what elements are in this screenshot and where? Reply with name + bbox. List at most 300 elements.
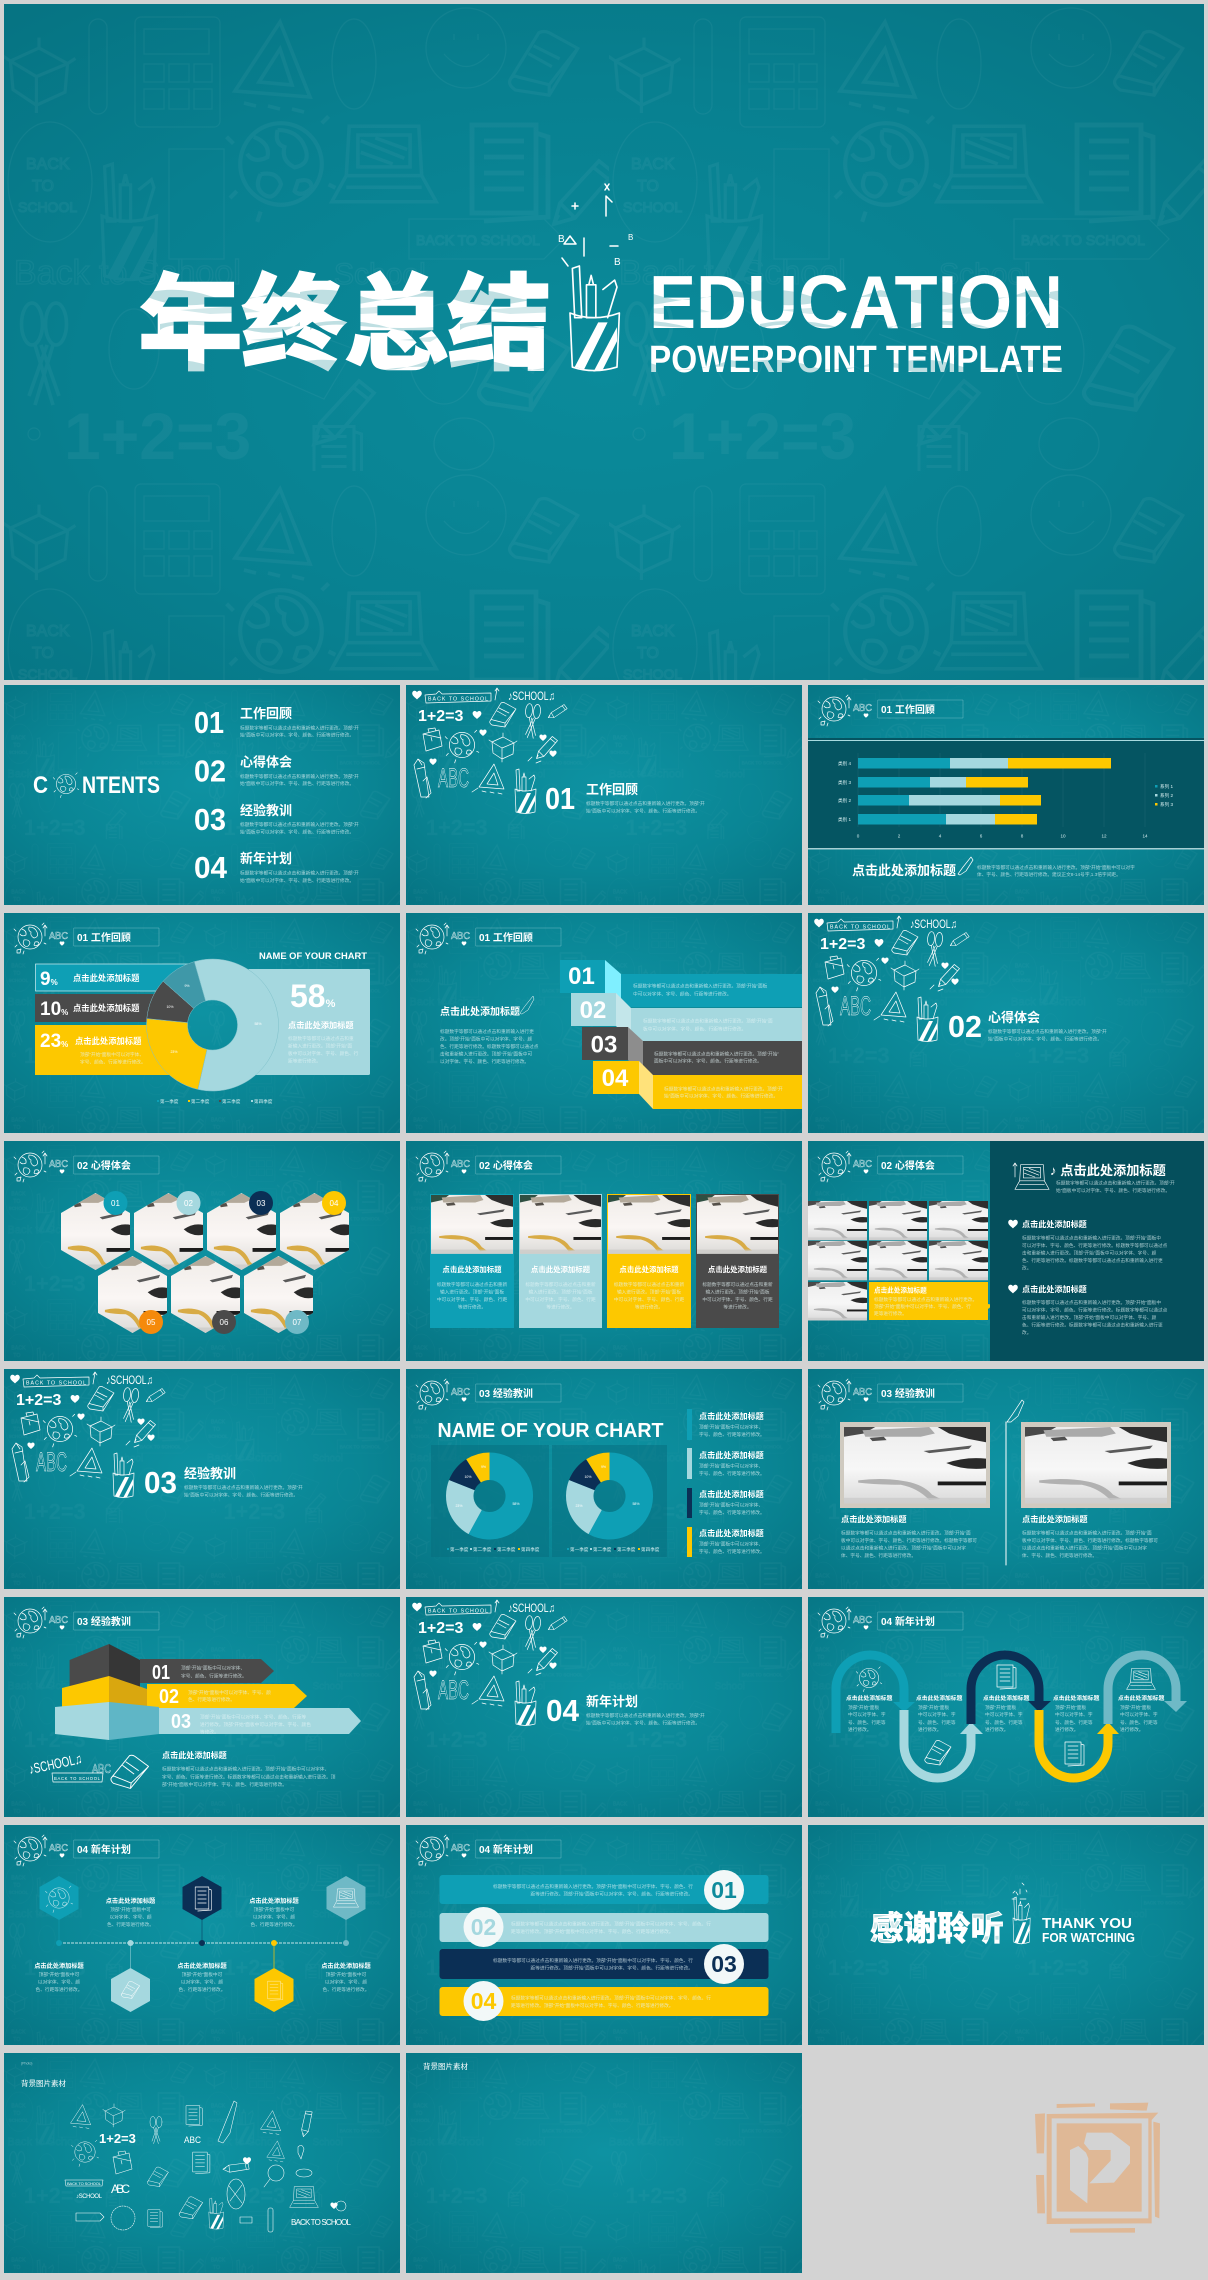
card 2	[519, 1194, 602, 1328]
panel item 1: 点击此处添加标题	[1022, 1219, 1087, 1229]
card 4: 标题数字等都可以通过点击和重新	[702, 1281, 773, 1288]
donut legend: 第一季度	[160, 1098, 179, 1105]
bottom text: 标题数字等都可以通过点击和重新输入进行更改。顶部“开始”面板中可以对字体、	[162, 1766, 329, 1773]
list item 4: 字号、颜色、行距等进行修改。	[699, 1548, 765, 1555]
contents item 02: 02	[194, 753, 226, 788]
timeline text 3: 点击此处添加标题	[34, 1962, 85, 1970]
contents item 03: 经验教训	[240, 803, 292, 818]
icon: pencil cup with floating symbols: B	[558, 234, 565, 245]
flow text 3: 进行修改。	[985, 1726, 1008, 1733]
section tag: 01 工作回顾	[77, 931, 131, 944]
flow text 1: 点击此处添加标题	[846, 1694, 893, 1702]
arrow 03: 03	[171, 1711, 191, 1733]
section tag: 04 新年计划	[77, 1843, 131, 1856]
doodle cluster: ABC	[438, 763, 469, 793]
donut panel 2	[552, 1445, 667, 1557]
flow text 4: 点击此处添加标题	[1053, 1694, 1100, 1702]
list item 1: 字号、颜色、行距等进行修改。	[699, 1431, 765, 1438]
card 1: 点击此处添加标题	[442, 1265, 502, 1274]
bar chart: 14	[1142, 834, 1148, 838]
step 02: 板中可以对字体、字号、颜色、行距等进行修改。	[643, 1026, 746, 1033]
doodle cluster: BACK TO SCHOOL	[428, 696, 488, 702]
timeline text 4: 顶部“开始”面板中可	[182, 1971, 223, 1978]
timeline text 1: 顶部“开始”面板中可	[110, 1906, 151, 1913]
donut panel 2: 第四季度	[641, 1546, 660, 1553]
contents item 02: 始”面板中可以对字体、字号、颜色、行距等进行修改。	[240, 780, 354, 787]
card 1: 标题数字等都可以通过点击和重新	[437, 1281, 507, 1288]
flow text 2: 号、颜色、行距等	[918, 1719, 956, 1726]
contents item 03: 标题数字等都可以通过点击和重新输入进行更改。顶部“开	[240, 821, 359, 828]
icon: brush	[520, 996, 534, 1014]
timeline text 4: 以对字体、字号、颜	[181, 1978, 223, 1986]
step 01: 中可以对字体、字号、颜色、行距等进行修改。	[633, 991, 731, 998]
divider with brush	[1006, 1400, 1024, 1565]
callout 58%	[248, 969, 370, 1075]
pill 03	[440, 1944, 768, 1984]
list item 3	[687, 1488, 765, 1518]
section tag: 04 新年计划	[479, 1843, 533, 1856]
section tag	[416, 1379, 561, 1410]
flow text 1: 号、颜色、行距等	[848, 1719, 886, 1726]
yellow caption box: 顶部“开始”面板中可以对字体、字号、颜色、行	[874, 1303, 971, 1310]
section tag: 03 经验教训	[77, 1615, 131, 1628]
chart legend	[1155, 783, 1173, 808]
icon: pencil cup with floating symbols: B	[614, 257, 621, 268]
section number: 01	[545, 781, 575, 816]
thank you line: THANK YOU	[1042, 1915, 1132, 1932]
card 2: 标题数字等都可以通过点击和重新	[525, 1281, 596, 1288]
slide: double donut charts	[406, 1369, 802, 1589]
section tag: 03 经验教训	[479, 1387, 533, 1400]
left text: 以对字体、字号、颜色、行距等进行修改。	[440, 1058, 529, 1065]
framed photo 1	[840, 1422, 990, 1508]
section tag	[14, 923, 159, 954]
list item 1	[687, 1409, 765, 1440]
callout 58%: 点击此处添加标题	[288, 1020, 354, 1030]
left text: 改。顶部“开始”面板中可以对字体、字号、颜	[440, 1036, 532, 1042]
contents item 04: 始”面板中可以对字体、字号、颜色、行距等进行修改。	[240, 877, 354, 884]
arrow 01: 顶部“开始”面板中可以对字体、	[181, 1664, 245, 1672]
panel item 2: 可以对字体、字号、颜色、行距等进行修改。标题数字等都可以通过点	[1022, 1306, 1168, 1313]
section tag	[818, 1151, 963, 1182]
callout 58%: 距等进行修改。	[288, 1058, 321, 1064]
donut chart: 23%	[170, 1050, 178, 1054]
list item 3: 字号、颜色、行距等进行修改。	[699, 1509, 765, 1516]
card 4: 点击此处添加标题	[708, 1265, 768, 1274]
pill 02	[440, 1907, 768, 1947]
slide: plain background material	[406, 2053, 802, 2273]
photo 2 caption	[1022, 1514, 1158, 1559]
panel intro: 标题数字等都可以通过点击和重新输入进行更改。顶部“开	[1056, 1180, 1175, 1186]
bar chart: 6	[980, 834, 983, 838]
greyscale photo grid	[808, 1201, 988, 1320]
pill 01: 01	[711, 1877, 737, 1903]
step 02: 标题数字等都可以通过点击和重新输入进行更改。顶部“开始”面	[643, 1018, 773, 1025]
step 04: 04	[602, 1065, 629, 1092]
pill 03: 标题数字等都可以通过点击和重新输入进行更改。顶部“开始”面板中可以对字体、字号、颜色、行	[493, 1957, 693, 1964]
arrow 03	[55, 1702, 361, 1740]
photo 2 caption: 标题数字等都可以通过点击和重新输入进行更改。顶部“开始”面	[1022, 1530, 1152, 1537]
photo 2 caption: 体、字号、颜色、行距等进行修改。	[1022, 1552, 1097, 1559]
timeline text 3: 色、行距等进行修改。	[36, 1986, 82, 1993]
panel item 1: 标题数字等都可以通过点击和重新输入进行更改。顶部“开始”面板中	[1022, 1234, 1161, 1242]
contents item 01: 01	[194, 705, 224, 740]
doodle sheet: ♪SCHOOL	[76, 2194, 103, 2200]
callout 23%: 字号、颜色、行距等进行修改。	[80, 1058, 146, 1066]
slide: four pill bars	[406, 1825, 802, 2045]
section tag	[416, 1835, 561, 1866]
doodle: school and book	[27, 1750, 150, 1790]
doodle cluster: ABC	[438, 1675, 469, 1705]
panel intro: 始”面板中可以对字体、字号、颜色、行距等进行修改。	[1056, 1187, 1170, 1194]
slide: section 01	[406, 685, 802, 905]
pill 01: 标题数字等都可以通过点击和重新输入进行更改。顶部“开始”面板中可以对字体、字号、颜色、行	[493, 1883, 693, 1890]
section tag: 01 工作回顾	[479, 931, 533, 944]
callout 58%: 板中可以对字体、字号、颜色、行	[288, 1050, 359, 1057]
left title: 点击此处添加标题	[440, 1005, 520, 1018]
arrow 03: 等修改。	[200, 1728, 219, 1736]
list item 1: 顶部“开始”面板中可以对字体、	[699, 1424, 763, 1430]
doodle: school and book: BACK TO SCHOOL	[54, 1776, 101, 1781]
doodle sheet: ABC	[111, 2182, 130, 2196]
section description: 始”面板中可以对字体、字号、颜色、行距等进行修改。	[586, 1720, 700, 1726]
flow arrow 5	[1108, 1655, 1187, 1724]
timeline text 1: 色、行距等进行修改。	[107, 1921, 154, 1928]
flow text 5: 顶部“开始”面板	[1120, 1704, 1152, 1711]
contents item 02: 标题数字等都可以通过点击和重新输入进行更改。顶部“开	[240, 773, 359, 780]
timeline text 2	[249, 1897, 300, 1928]
donut panel 2: 第三季度	[617, 1546, 636, 1553]
section tag: ABC	[451, 931, 470, 942]
pill 04: 距等进行修改。顶部“开始”面板中可以对字体、字号、颜色、行距等进行修改。	[511, 2002, 674, 2009]
left text: 色、行距等进行修改。标题数字等都可以通过点	[440, 1043, 539, 1050]
step 01: 标题数字等都可以通过点击和重新输入进行更改。顶部“开始”面板	[633, 983, 768, 990]
doodle cluster: BACK TO SCHOOL	[428, 1608, 488, 1614]
pill 04: 04	[471, 1988, 496, 2014]
callout 10%: 点击此处添加标题	[73, 1003, 140, 1013]
photo 2 caption: 点击此处添加标题	[1022, 1514, 1088, 1524]
icon: pencil cup with floating symbols	[558, 184, 633, 372]
callout 23%: 顶部“开始”面板中可以对字体、	[80, 1051, 144, 1058]
contents item 01: 工作回顾	[240, 706, 292, 721]
card 3: 中可以对字体、字号、颜色、行距	[614, 1296, 684, 1303]
contents heading: C	[33, 772, 48, 799]
card 3: 等进行修改。	[635, 1304, 663, 1310]
slide: 3D arrow steps	[4, 1597, 400, 1817]
slide: thank you	[808, 1825, 1204, 2045]
card 4: 中可以对字体、字号、颜色、行距	[702, 1296, 773, 1303]
step 03: 面板中可以对字体、字号、颜色、行距等进行修改。	[654, 1058, 762, 1065]
flow text 1: 顶部“开始”面板	[848, 1704, 880, 1711]
section tag	[416, 1151, 561, 1182]
takeaway text: 标题数字等都可以通过点击和重新输入进行更改。顶部“开始”面板中可以对字	[977, 864, 1135, 871]
takeaway text	[977, 864, 1135, 878]
donut panel 2: 第二季度	[593, 1546, 612, 1553]
contents item 03: 始”面板中可以对字体、字号、颜色、行距等进行修改。	[240, 828, 354, 836]
panel item 2: 标题数字等都可以通过点击和重新输入进行更改。顶部“开始”面板中	[1022, 1299, 1161, 1306]
section description: 标题数字等都可以通过点击和重新输入进行更改。顶部“开	[988, 1028, 1107, 1035]
icon: pencil cup	[1012, 1883, 1030, 1944]
timeline text 2: 点击此处添加标题	[249, 1897, 300, 1905]
flow arrow 3	[971, 1655, 1051, 1724]
hexagon: notepad	[254, 1968, 294, 2012]
hexagon: eraser	[111, 1968, 150, 2012]
timeline text 5: 色、行距等进行修改。	[323, 1986, 369, 1993]
section tag: ABC	[451, 1387, 470, 1398]
number badges: 01	[111, 1199, 120, 1208]
flow arrow 2	[904, 1710, 983, 1778]
flow text 4: 顶部“开始”面板	[1055, 1704, 1087, 1711]
doodle cluster	[412, 688, 568, 814]
section tag: ABC	[853, 1387, 872, 1398]
callout 9%: 9%	[40, 969, 58, 990]
panel item 1: 可以对字体、字号、颜色、行距等进行修改。标题数字等都可以通过点	[1022, 1242, 1168, 1249]
section description	[586, 800, 705, 814]
callout 58%: 58%	[290, 978, 336, 1014]
list item 2: 字号、颜色、行距等进行修改。	[699, 1470, 765, 1477]
photo 1 caption: 体、字号、颜色、行距等进行修改。	[841, 1552, 916, 1559]
card 2: 输入进行更改。顶部“开始”面板	[528, 1288, 593, 1296]
icon: laptop	[1013, 1163, 1049, 1189]
donut chart: 58%	[254, 1022, 262, 1026]
donut chart: 10%	[166, 1005, 174, 1009]
left text: 击和重新输入进行更改。顶部“开始”面板中可	[440, 1050, 532, 1058]
section description	[184, 1484, 303, 1498]
flow text 2: 中可以对字体、字	[918, 1711, 956, 1718]
pill 02: 标题数字等都可以通过点击和重新输入进行更改。顶部“开始”面板中可以对字体、字号、颜色、行	[511, 1921, 711, 1928]
contents item 03	[194, 802, 359, 837]
bar chart: 8	[1021, 834, 1024, 838]
list item 4: 顶部“开始”面板中可以对字体、	[699, 1540, 763, 1548]
contents item 01	[194, 705, 359, 740]
section tag	[416, 923, 561, 954]
photo 1 caption: 标题数字等都可以通过点击和重新输入进行更改。顶部“开始”面	[841, 1530, 971, 1537]
framed photo 2	[1021, 1422, 1171, 1508]
section tag	[14, 1151, 159, 1182]
card 1	[430, 1194, 514, 1328]
callout 23%	[35, 1025, 170, 1075]
section title: 经验教训	[184, 1466, 236, 1481]
closing title: 感谢聆听	[870, 1911, 1004, 1948]
section tag: ABC	[853, 703, 872, 714]
hero title: english: EDUCATION	[649, 260, 1063, 344]
panel item 2: 改。	[1022, 1329, 1031, 1336]
photo 1 caption	[841, 1514, 977, 1559]
flow text 5: 点击此处添加标题	[1118, 1694, 1165, 1702]
hexagon: globe	[40, 1876, 78, 1920]
bar chart: 12	[1101, 834, 1107, 838]
timeline	[56, 1919, 349, 1968]
left text: 标题数字等都可以通过点击和重新输入进行更	[440, 1028, 534, 1035]
pill 03: 距等进行修改。顶部“开始”面板中可以对字体、字号、颜色、行距等进行修改。	[530, 1964, 693, 1972]
slide: four steps staircase	[406, 913, 802, 1133]
section tag	[14, 1835, 159, 1866]
section tag: ABC	[49, 1615, 68, 1626]
number badges	[104, 1191, 346, 1334]
doodle cluster: 1+2=3	[820, 936, 865, 953]
callout 23%: 点击此处添加标题	[75, 1036, 142, 1046]
slide: section 03	[4, 1369, 400, 1589]
step 03: 标题数字等都可以通过点击和重新输入进行更改。顶部“开始”	[654, 1051, 779, 1058]
section description: 始”面板中可以对字体、字号、颜色、行距等进行修改。	[586, 808, 700, 814]
section description: 始”面板中可以对字体、字号、颜色、行距等进行修改。	[988, 1036, 1102, 1042]
flow arrow 1	[836, 1655, 915, 1733]
bottom title: 点击此处添加标题	[162, 1750, 227, 1760]
donut panel 2: 第一季度	[570, 1546, 589, 1553]
donut panel 2: 23%	[575, 1504, 583, 1508]
section tag: ABC	[49, 1843, 68, 1854]
flow text 3: 号、颜色、行距等	[985, 1719, 1023, 1726]
takeaway text: 体、字号、颜色、行距等进行修改。建议正文8-14号字,1.3倍字间距。	[977, 871, 1121, 878]
flow text 1: 进行修改。	[848, 1726, 871, 1733]
flow text 5	[1118, 1694, 1165, 1733]
section tag	[818, 695, 963, 726]
flow text 2: 顶部“开始”面板	[918, 1704, 950, 1711]
section tag: ABC	[853, 1159, 872, 1170]
hexagon: laptop	[326, 1876, 366, 1920]
doodle sheet: BACK TO SCHOOL	[291, 2218, 352, 2227]
list item 4: 点击此处添加标题	[699, 1528, 764, 1538]
flow text 5: 中可以对字体、字	[1120, 1711, 1158, 1718]
photo 2 caption: 板中可以对字体、字号、颜色、行距等进行修改。标题数字等都可	[1022, 1537, 1158, 1544]
bar chart: 类别 1	[838, 816, 851, 823]
donut panel 1: 第二季度	[473, 1546, 492, 1553]
timeline text 1: 点击此处添加标题	[106, 1897, 156, 1905]
donut panel 1: 第三季度	[497, 1546, 516, 1553]
material title: 背景图片素材	[21, 2078, 66, 2088]
step 03: 03	[591, 1032, 617, 1058]
yellow caption box: 距等进行修改。	[874, 1310, 907, 1317]
chart legend: 系列 3	[1160, 801, 1173, 808]
slide: photo grid with dark panel	[808, 1141, 1204, 1361]
bar chart: 10	[1060, 834, 1066, 838]
contents item 02	[194, 753, 359, 788]
section description	[586, 1712, 705, 1726]
arrow 02: 02	[159, 1686, 179, 1708]
list item 2: 顶部“开始”面板中可以对字体、	[699, 1462, 763, 1470]
card 1: 等进行修改。	[458, 1304, 486, 1310]
section description: 标题数字等都可以通过点击和重新输入进行更改。顶部“开	[586, 1712, 705, 1719]
section tag: ABC	[49, 1159, 68, 1170]
doodle cluster: ABC	[840, 991, 871, 1021]
card 3	[607, 1194, 691, 1328]
callout 10%	[35, 994, 160, 1022]
section tag: 01 工作回顾	[881, 703, 935, 716]
doodle cluster	[10, 1372, 166, 1498]
contents heading: NTENTS	[82, 772, 160, 799]
list item 1: 点击此处添加标题	[699, 1411, 764, 1421]
section tag: ABC	[451, 1159, 470, 1170]
donut panel 2: 58%	[632, 1502, 640, 1506]
donut panel 1: 9%	[481, 1465, 486, 1469]
doodle cluster: BACK TO SCHOOL	[830, 924, 890, 930]
card 1: 输入进行更改。顶部“开始”面板	[440, 1288, 504, 1296]
number badges: 02	[184, 1199, 193, 1208]
flow text 2	[916, 1694, 963, 1733]
section description: 标题数字等都可以通过点击和重新输入进行更改。顶部“开	[586, 800, 705, 807]
timeline text 3	[34, 1962, 85, 1993]
pill 01	[440, 1870, 768, 1910]
contents item 04: 新年计划	[240, 851, 292, 866]
step 02: 02	[580, 997, 606, 1024]
callout 23%: 23%	[40, 1031, 68, 1052]
step 04: 始”面板中可以对字体、字号、颜色、行距等进行修改。	[664, 1093, 778, 1100]
bottom text	[162, 1766, 336, 1788]
callout 58%: 新输入进行更改。顶部“开始”面	[288, 1042, 352, 1050]
section tag: 03 经验教训	[881, 1387, 935, 1400]
section description: 始”面板中可以对字体、字号、颜色、行距等进行修改。	[184, 1492, 298, 1498]
contents heading	[33, 772, 160, 799]
panel intro	[1056, 1180, 1175, 1194]
chart legend: 系列 2	[1160, 792, 1173, 799]
bottom text: 部“开始”面板中可以对字体、字号、颜色、行距等进行修改。	[162, 1781, 287, 1788]
section tag	[818, 1379, 963, 1410]
doodle sheet: 1+2=3	[99, 2131, 136, 2146]
donut legend: 第二季度	[191, 1098, 210, 1105]
arrow 02: 色、行距等进行修改。	[188, 1696, 235, 1703]
donut legend: 第四季度	[254, 1098, 273, 1105]
bar chart: 类别 2	[838, 797, 851, 804]
flow text 2: 点击此处添加标题	[916, 1694, 963, 1702]
list item 2: 点击此处添加标题	[699, 1450, 764, 1460]
hexagon: calculator	[182, 1876, 222, 1920]
timeline text 1: 以对字体、字号、颜	[109, 1914, 152, 1920]
card 2: 等进行修改。	[546, 1304, 575, 1310]
slide: two framed photos	[808, 1369, 1204, 1589]
slide: background doodle material	[4, 2053, 400, 2273]
donut chart: 9%	[184, 984, 190, 988]
timeline text 5: 以对字体、字号、颜	[325, 1978, 367, 1986]
panel item 2	[1008, 1284, 1168, 1336]
donut chart	[146, 959, 279, 1091]
flow text 5: 进行修改。	[1120, 1726, 1143, 1733]
slide: stacked bar chart	[808, 685, 1204, 905]
card 3: 点击此处添加标题	[619, 1265, 679, 1274]
watermark logo stamp	[1035, 2103, 1160, 2233]
doodle cluster: ♪SCHOOL♫	[508, 689, 555, 703]
panel item 1	[1008, 1219, 1168, 1272]
timeline text 2: 色、行距等进行修改。	[251, 1921, 297, 1928]
bar chart: 类别 4	[838, 760, 851, 767]
bottom text: 字号、颜色、行距等进行修改。标题数字等都可以通过点击和重新输入进行更改。顶	[162, 1774, 336, 1780]
photo 1 caption: 以通过点击和重新输入进行更改。顶部“开始”面板中可以对字	[841, 1545, 966, 1552]
list item 4	[687, 1527, 765, 1557]
doodle cluster: ♪SCHOOL♫	[508, 1601, 555, 1615]
flow text 1	[846, 1694, 893, 1733]
timeline text 4	[177, 1962, 228, 1993]
section tag: ABC	[49, 931, 68, 942]
for watching line: FOR WATCHING	[1042, 1930, 1135, 1945]
chart heading: NAME OF YOUR CHART	[438, 1420, 664, 1442]
donut legend	[157, 1098, 273, 1105]
section number: 03	[144, 1465, 177, 1500]
card 1: 中可以对字体、字号、颜色、行距	[437, 1296, 507, 1303]
card 3: 标题数字等都可以通过点击和重新	[614, 1281, 684, 1288]
section tag	[14, 1607, 159, 1638]
arrow 03: 顶部“开始”面板中可以对字体、字号、颜色、行距等	[200, 1714, 307, 1720]
doodle cluster: ABC	[36, 1447, 67, 1477]
timeline text 1	[106, 1897, 156, 1928]
flow text 5: 号、颜色、行距等	[1120, 1719, 1158, 1726]
section title: 新年计划	[586, 1694, 638, 1709]
section title: 工作回顾	[586, 782, 638, 797]
section tag	[818, 1607, 963, 1638]
yellow caption box: 点击此处添加标题	[874, 1286, 927, 1294]
material title: 背景图片素材	[423, 2061, 468, 2071]
list item 2	[687, 1448, 765, 1479]
timeline text 4: 点击此处添加标题	[177, 1962, 228, 1970]
flow text 3	[983, 1694, 1030, 1733]
